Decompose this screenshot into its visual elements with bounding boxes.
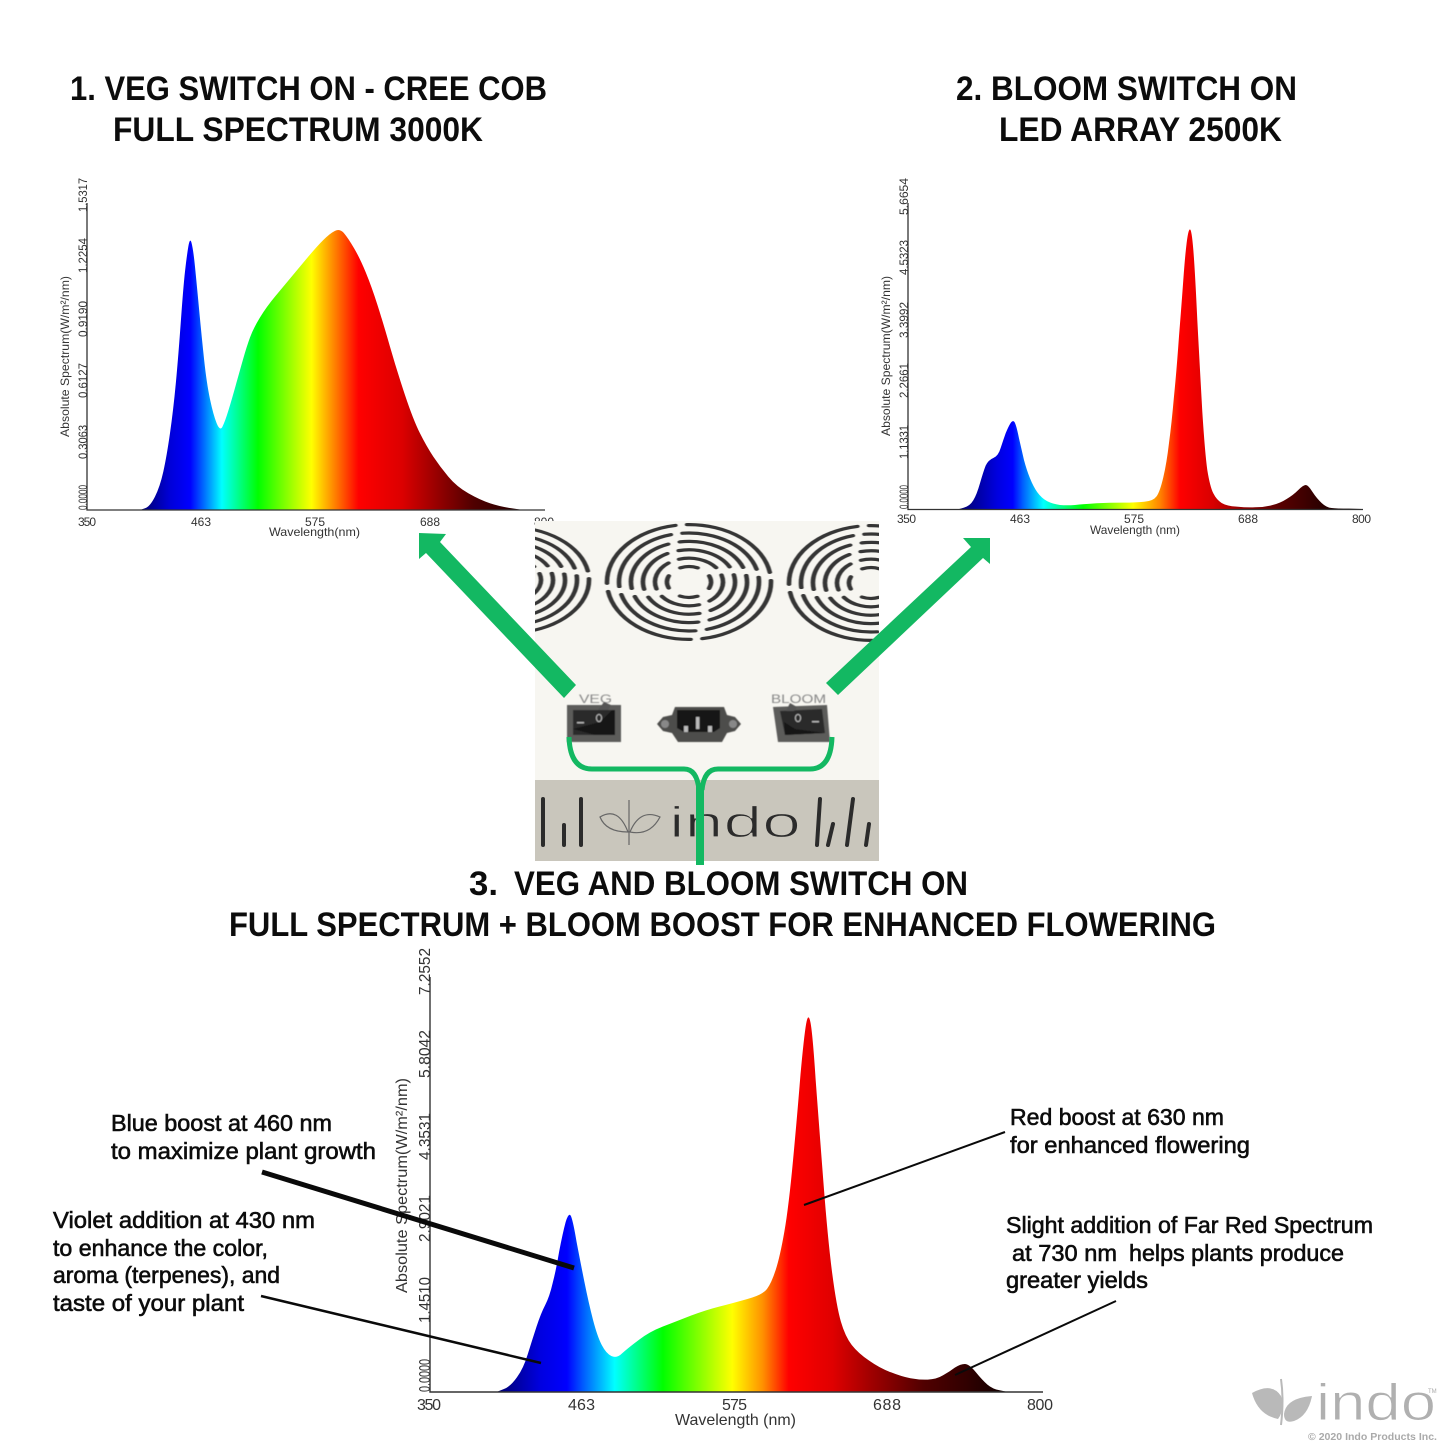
title: combined heading: 3. bbox=[469, 865, 498, 903]
callout: far red: greater yields bbox=[1006, 1267, 1148, 1293]
callout: far red bbox=[955, 1212, 1373, 1375]
arrow: veg switch to chart 1 bbox=[419, 533, 576, 698]
chart: combined spectrum: 7.2552 bbox=[417, 948, 434, 995]
chart: veg full spectrum 3000K: 575 bbox=[305, 515, 325, 529]
bloom switch bbox=[771, 692, 830, 742]
chart: combined spectrum: 350 bbox=[417, 1397, 441, 1414]
callout: red boost: Red boost at 630 nm bbox=[1010, 1104, 1224, 1130]
chart: bloom led array 2500K: 800 bbox=[1352, 512, 1371, 526]
chart: bloom led array 2500K bbox=[879, 178, 1371, 537]
callout: blue boost bbox=[111, 1110, 574, 1268]
lower front plate with logo: indo bbox=[669, 798, 801, 847]
callout: blue boost: Blue boost at 460 nm bbox=[111, 1110, 332, 1136]
chart: veg full spectrum 3000K: 1.2254 bbox=[76, 238, 90, 273]
chart: combined spectrum: 688 bbox=[873, 1397, 901, 1414]
photo panel: fixture back with switches bbox=[535, 521, 879, 861]
spectrum area: combined bbox=[497, 1017, 1006, 1392]
chart: combined spectrum: 1.4510 bbox=[417, 1277, 434, 1323]
chart: combined spectrum: 800 bbox=[1027, 1397, 1053, 1414]
title: veg switch heading: FULL SPECTRUM 3000K bbox=[113, 111, 483, 149]
bracket arrow: both switches to chart 3 bbox=[569, 737, 832, 865]
callout: far red: at 730 nm bbox=[1012, 1240, 1117, 1266]
chart: veg full spectrum 3000K: 463 bbox=[191, 515, 211, 529]
chart: veg full spectrum 3000K: 688 bbox=[420, 515, 440, 529]
chart: veg full spectrum 3000K: 1.5317 bbox=[76, 178, 90, 212]
logo: indo brand mark bbox=[1252, 1374, 1437, 1443]
logo: indo brand mark: TM bbox=[1428, 1389, 1437, 1395]
title: veg switch heading: 1. VEG SWITCH ON - CREE COB bbox=[70, 70, 547, 108]
chart: bloom led array 2500K: 575 bbox=[1124, 512, 1144, 526]
logo: indo brand mark: © 2020 Indo Products Inc. bbox=[1308, 1431, 1437, 1443]
chart: combined spectrum: 0.0000 bbox=[417, 1359, 434, 1392]
chart: veg full spectrum 3000K: 0.9190 bbox=[76, 301, 90, 337]
chart: veg full spectrum 3000K bbox=[58, 178, 554, 539]
callout: far red: helps plants produce bbox=[1129, 1240, 1344, 1266]
title: veg switch heading bbox=[70, 70, 547, 149]
icon: left fan grille bbox=[535, 528, 592, 632]
chart: bloom led array 2500K: 2.2661 bbox=[897, 363, 911, 398]
arrow: bloom switch to chart 2 bbox=[826, 538, 990, 695]
chart: combined spectrum bbox=[394, 948, 1053, 1429]
title: bloom switch heading: 2. BLOOM SWITCH ON bbox=[956, 70, 1297, 108]
power socket bbox=[657, 707, 741, 742]
chart: veg full spectrum 3000K: 0.3063 bbox=[76, 425, 90, 459]
title: combined heading: VEG AND BLOOM SWITCH ON bbox=[514, 865, 968, 903]
spectrum area: bloom bbox=[958, 229, 1362, 509]
lower front plate with logo bbox=[535, 780, 879, 861]
callout: red boost: for enhanced flowering bbox=[1010, 1132, 1250, 1158]
chart: bloom led array 2500K: 3.3992 bbox=[897, 302, 911, 338]
chart: bloom led array 2500K: Wavelength (nm) bbox=[1090, 523, 1180, 537]
chart: combined spectrum: 4.3531 bbox=[417, 1113, 434, 1160]
chart: veg full spectrum 3000K: 0.0000 bbox=[76, 485, 90, 510]
icon: right fan grille bbox=[786, 524, 879, 642]
chart: bloom led array 2500K: 688 bbox=[1238, 512, 1258, 526]
callout: violet addition bbox=[53, 1207, 541, 1363]
icon: center fan grille bbox=[606, 524, 772, 640]
logo: indo brand mark: indo bbox=[1316, 1374, 1436, 1432]
icon: leaves bbox=[1252, 1379, 1312, 1425]
callout: violet addition: aroma (terpenes), and bbox=[53, 1262, 280, 1288]
chart: combined spectrum: 463 bbox=[568, 1397, 595, 1414]
chart: combined spectrum: 5.8042 bbox=[417, 1030, 434, 1078]
chart: veg full spectrum 3000K: 800 bbox=[534, 515, 554, 529]
callout: red boost bbox=[804, 1104, 1250, 1205]
chart: veg full spectrum 3000K: Wavelength(nm) bbox=[269, 525, 360, 539]
chart: bloom led array 2500K: 463 bbox=[1010, 512, 1030, 526]
chart: bloom led array 2500K: 5.6654 bbox=[897, 178, 911, 215]
title: combined heading bbox=[229, 865, 1216, 944]
chart: veg full spectrum 3000K: Absolute Spectrum(W/m²/nm) bbox=[58, 276, 72, 437]
title: combined heading: FULL SPECTRUM + BLOOM BOOST FOR ENHANCED FLOWERING bbox=[229, 906, 1216, 944]
chart: combined spectrum: Absolute Spectrum(W/m²/nm) bbox=[394, 1078, 411, 1293]
chart: veg full spectrum 3000K: 350 bbox=[78, 515, 96, 529]
chart: combined spectrum: 575 bbox=[722, 1397, 747, 1414]
chart: veg full spectrum 3000K: 0.6127 bbox=[76, 363, 90, 398]
chart: bloom led array 2500K: 4.5323 bbox=[897, 240, 911, 275]
chart: combined spectrum: Wavelength (nm) bbox=[675, 1412, 796, 1429]
callout: violet addition: Violet addition at 430 nm bbox=[53, 1207, 315, 1233]
callout: violet addition: taste of your plant bbox=[53, 1290, 245, 1316]
veg switch bbox=[567, 692, 621, 742]
chart: bloom led array 2500K: 350 bbox=[897, 512, 916, 526]
chart: combined spectrum: 2.9021 bbox=[417, 1195, 434, 1242]
chart: bloom led array 2500K: 1.1331 bbox=[897, 425, 911, 459]
callout: blue boost: to maximize plant growth bbox=[111, 1138, 376, 1164]
title: bloom switch heading bbox=[956, 70, 1297, 149]
chart: bloom led array 2500K: Absolute Spectrum(W/m²/nm) bbox=[879, 276, 893, 436]
callout: far red: Slight addition of Far Red Spectrum bbox=[1006, 1212, 1373, 1238]
callout: violet addition: to enhance the color, bbox=[53, 1235, 268, 1261]
title: bloom switch heading: LED ARRAY 2500K bbox=[999, 111, 1282, 149]
chart: bloom led array 2500K: 0.0000 bbox=[897, 485, 911, 509]
spectrum area: veg bbox=[140, 230, 523, 510]
bloom switch: BLOOM bbox=[771, 692, 826, 706]
veg switch: VEG bbox=[579, 692, 612, 706]
